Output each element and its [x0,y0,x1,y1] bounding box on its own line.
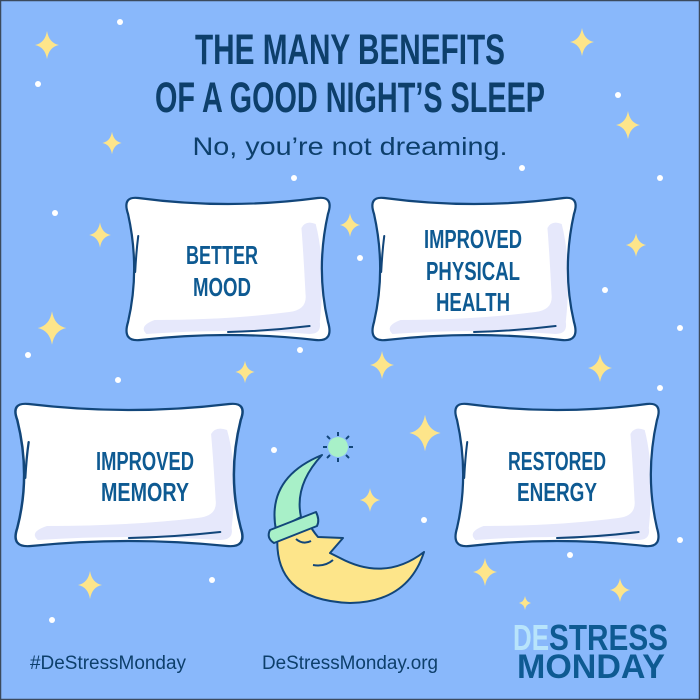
pillow: restored energy: ENERGY [517,477,597,507]
footer: hashtag: #DeStressMonday [30,653,186,674]
pillow: improved physical health: IMPROVED [424,224,522,254]
icon: sleeping moon [269,432,424,603]
logo [513,617,668,686]
title: THE MANY BENEFITS [195,26,505,74]
pillow: improved memory [15,404,243,546]
pillow: restored energy: RESTORED [508,446,606,476]
pillow: better mood [126,198,330,340]
logo: MONDAY [517,648,665,686]
pillow: better mood: BETTER [186,240,258,270]
logo: DE [513,617,549,658]
footer: website: DeStressMonday.org [262,653,438,674]
pillow: improved physical health [372,198,576,340]
subtitle: No, you’re not dreaming. [192,133,508,161]
pillow: improved memory: IMPROVED [96,446,194,476]
pillow: improved memory: MEMORY [101,477,189,507]
title [155,26,545,122]
pillow: improved physical health: PHYSICAL [426,256,520,286]
pillow: restored energy [455,404,659,546]
pillow: improved physical health: HEALTH [436,287,510,317]
stars [35,28,646,610]
logo: STRESS [549,617,668,658]
pillow: better mood: MOOD [193,272,251,302]
